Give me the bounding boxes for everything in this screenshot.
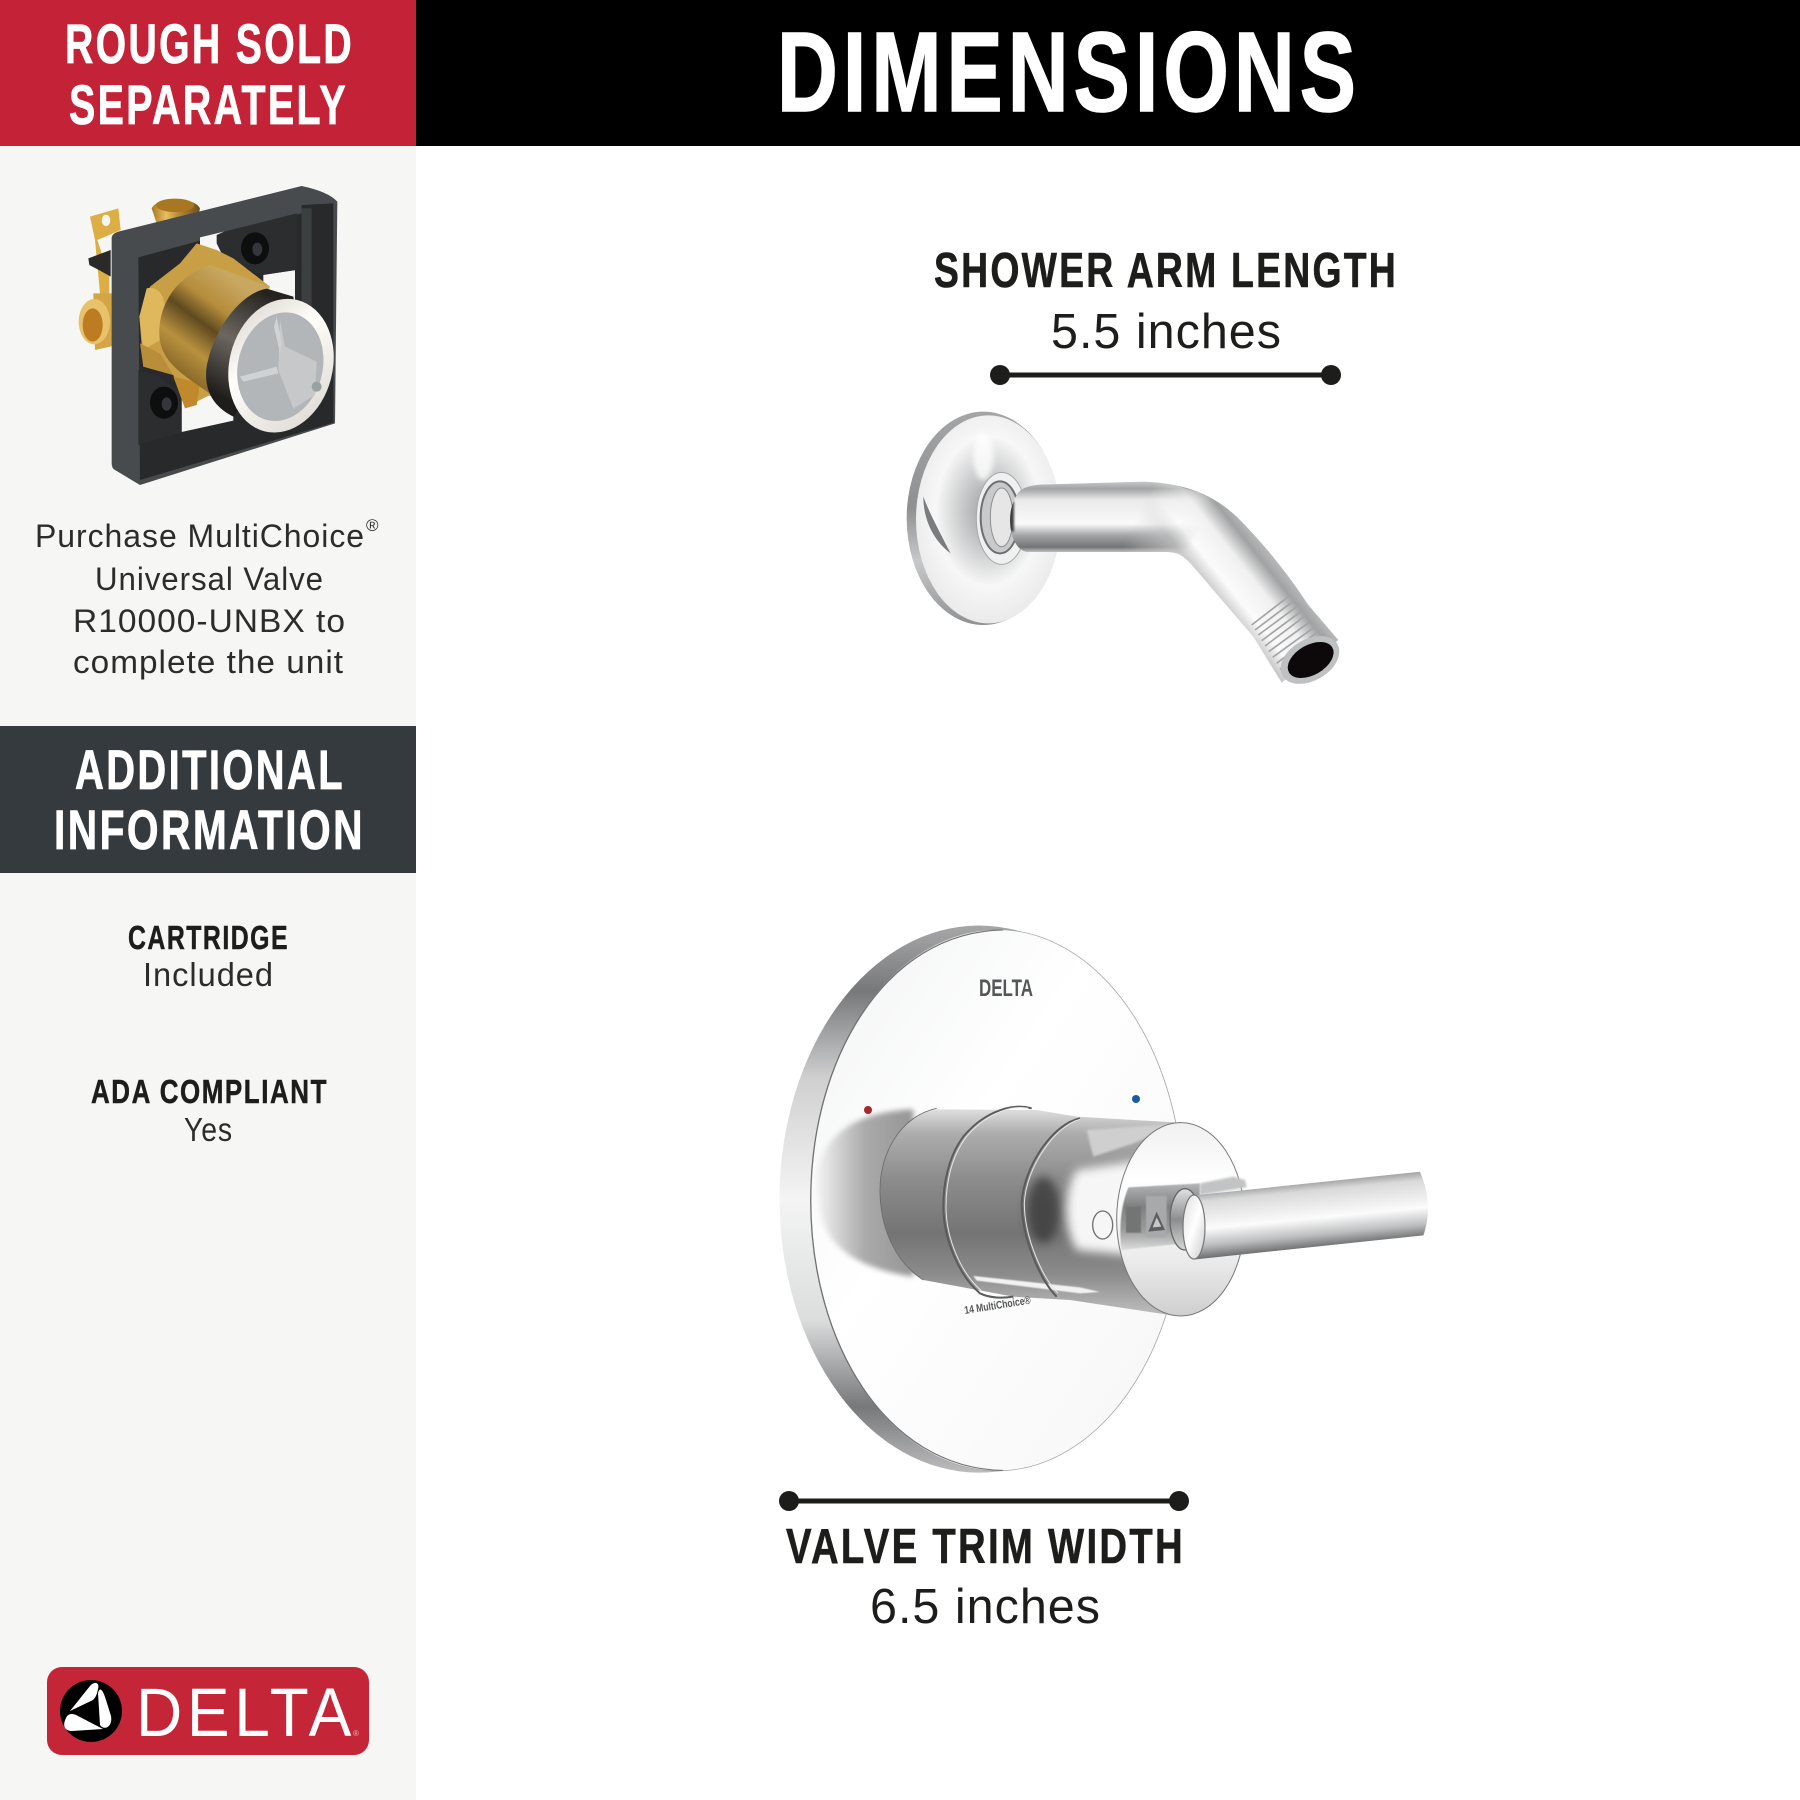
spec: ada compliant xyxy=(91,1073,328,1148)
product image: rough valve xyxy=(79,186,347,485)
spec: ada compliant: ADA COMPLIANT xyxy=(91,1073,328,1110)
wall plate xyxy=(780,926,1184,1473)
product image: shower arm xyxy=(907,412,1348,694)
flange xyxy=(907,412,1061,625)
cast shadow xyxy=(817,1109,913,1277)
label: valve trim width: VALVE TRIM WIDTH xyxy=(786,1520,1185,1574)
sidebar background xyxy=(0,0,416,1800)
brass valve body xyxy=(139,243,270,408)
lever end xyxy=(1183,1195,1205,1259)
lever collar xyxy=(1170,1189,1200,1250)
rough valve description: Purchase MultiChoice xyxy=(35,518,365,554)
logo mark: three teardrops xyxy=(64,1683,111,1731)
label: shower arm length: SHOWER ARM LENGTH xyxy=(934,244,1398,298)
arm end opening xyxy=(1272,626,1348,694)
spec: cartridge xyxy=(128,919,289,993)
delta logo xyxy=(47,1667,369,1755)
plastic cap xyxy=(226,303,335,430)
right inner wall strip xyxy=(302,208,312,415)
handle end cap group xyxy=(1093,1123,1247,1316)
engraved text: 14 MultiChoice® xyxy=(964,1295,1032,1317)
chrome highlight xyxy=(1067,1160,1143,1257)
rough valve description xyxy=(35,516,379,680)
upper facet xyxy=(1087,1123,1180,1157)
spec: cartridge: CARTRIDGE xyxy=(128,919,289,956)
chrome ring xyxy=(214,288,347,444)
lever arm xyxy=(1194,1172,1428,1259)
cap reflection xyxy=(1120,1183,1200,1250)
dimension line: shower arm xyxy=(990,365,1341,385)
frame window: right xyxy=(263,270,295,300)
cap reflection right xyxy=(1200,1177,1247,1195)
mounting tab xyxy=(90,208,121,300)
dimension line: valve trim xyxy=(779,1491,1189,1511)
banner: additional information: ADDITIONAL xyxy=(75,738,345,801)
spec: ada compliant: Yes xyxy=(184,1111,233,1148)
banner: additional information: INFORMATION xyxy=(54,798,365,861)
label: shower arm length xyxy=(934,244,1398,359)
end cap xyxy=(1117,1123,1245,1316)
top brass fitting xyxy=(152,199,200,267)
title banner: dimensions: DIMENSIONS xyxy=(777,9,1361,135)
frame inner walls xyxy=(138,203,333,480)
plastic frame xyxy=(112,186,337,485)
product image: valve trim xyxy=(780,926,1428,1473)
reflected stem detail xyxy=(1126,1196,1167,1237)
banner: rough sold separately xyxy=(0,0,416,146)
delta logo: ® xyxy=(353,1729,359,1738)
frame window: top xyxy=(200,232,224,263)
rough valve description: complete the unit xyxy=(73,644,344,680)
banner: rough sold separately: ROUGH SOLD xyxy=(65,12,354,75)
left brass pipe xyxy=(79,293,140,350)
seams xyxy=(880,1107,1080,1298)
rough valve description: R10000-UNBX to xyxy=(73,603,346,639)
body cylinder xyxy=(880,1109,1180,1315)
threads xyxy=(1252,597,1325,669)
lower streak xyxy=(973,1276,1100,1293)
plate logo text: DELTA xyxy=(979,975,1033,1002)
label: valve trim width xyxy=(786,1520,1185,1634)
banner: rough sold separately: SEPARATELY xyxy=(69,73,348,136)
valve cylinder xyxy=(159,265,270,398)
hot indicator dot xyxy=(864,1106,872,1114)
dark core xyxy=(1027,1177,1060,1243)
label: valve trim width: 6.5 inches xyxy=(870,1580,1101,1634)
set screw xyxy=(1093,1211,1113,1239)
delta logo: DELTA xyxy=(136,1674,356,1751)
frame window: bottom xyxy=(182,390,233,432)
plate face xyxy=(811,930,1184,1471)
dark ring xyxy=(206,289,300,417)
title banner: dimensions xyxy=(416,0,1800,146)
plate rim xyxy=(780,926,1178,1473)
spec: cartridge: Included xyxy=(143,956,274,993)
grommet bottom left xyxy=(138,370,182,445)
cold indicator dot xyxy=(1132,1095,1140,1103)
rough valve description: ® xyxy=(366,516,379,535)
handle body xyxy=(817,1107,1180,1315)
arm tube xyxy=(1010,482,1338,682)
rough valve description: Universal Valve xyxy=(95,561,324,597)
banner: additional information xyxy=(0,726,416,873)
label: shower arm length: 5.5 inches xyxy=(1051,305,1282,359)
grommet top right xyxy=(217,213,297,275)
face edge xyxy=(811,930,1003,1470)
escutcheon collar xyxy=(976,472,1027,564)
black clip xyxy=(88,250,111,277)
